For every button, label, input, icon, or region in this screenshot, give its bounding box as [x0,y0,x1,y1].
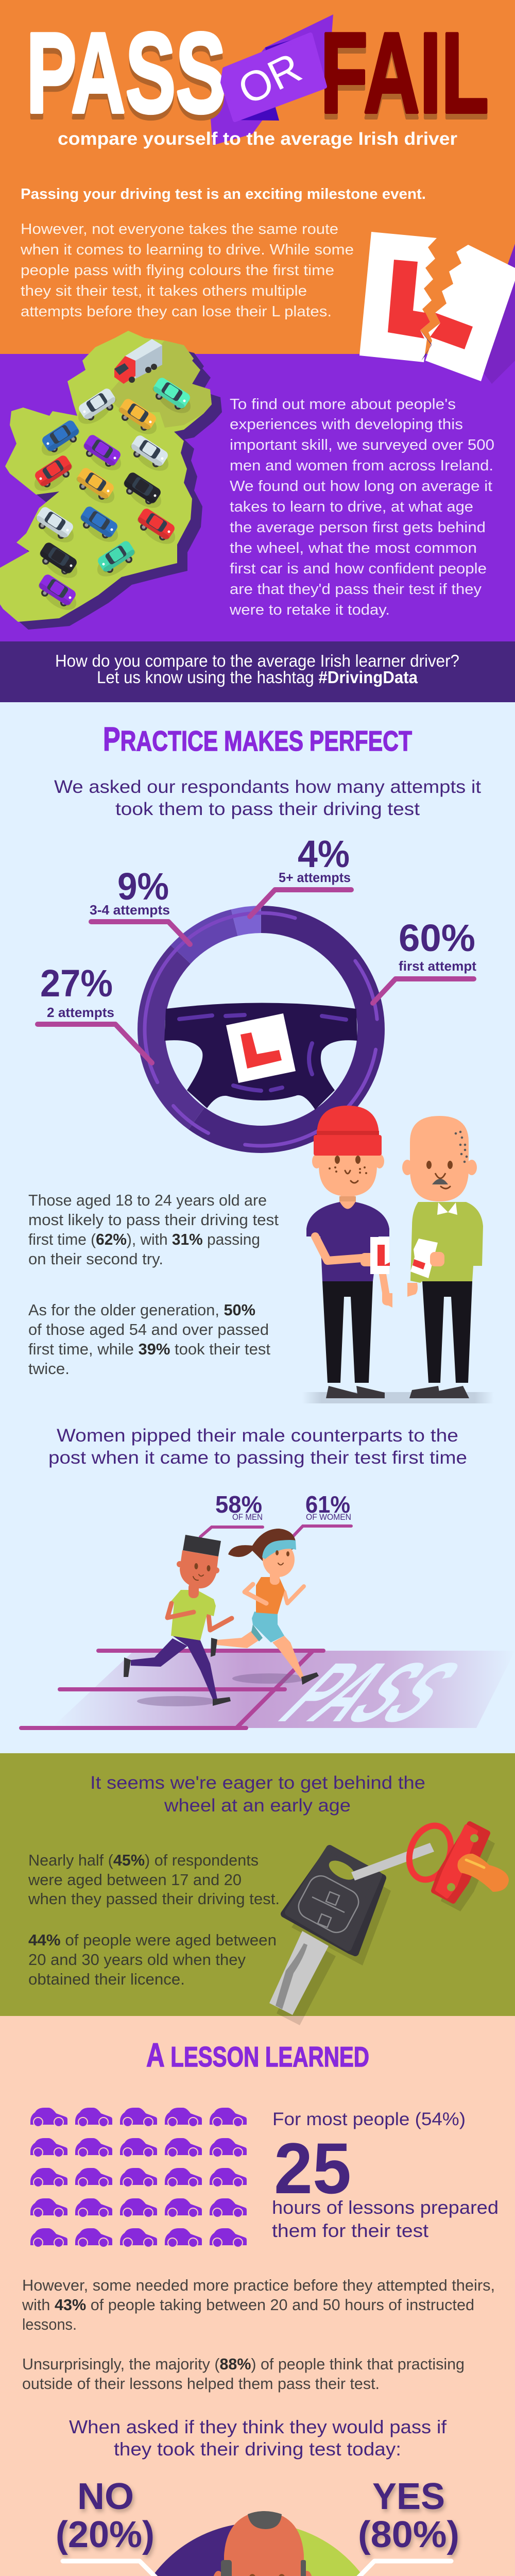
lessons text block: outside of their lessons helped them pass their test. [22,2375,380,2393]
survey text [229,396,494,618]
panel: a lesson learned [0,2016,515,2576]
northern region [106,341,212,428]
panel: early age [0,1753,515,2016]
intro text: However, not everyone takes the same route [21,221,338,238]
illustration: young man and old man with torn L plate [302,1106,494,1403]
heading: a lesson learned: A LESSON LEARNED [146,2036,369,2074]
chart: steering wheel donut of attempts [38,833,476,1146]
yes label: (80%) [358,2514,459,2555]
age text block: on their second try. [28,1250,163,1268]
label: 9%: 9% [117,865,169,908]
heading: early age [90,1773,425,1816]
survey text: To find out more about people's [230,396,456,413]
61% of women: 61% [305,1491,350,1518]
stat: 25 hours: For most people (54%) [272,2109,466,2129]
early age text block: Nearly half (45%) of respondents [28,1851,259,1869]
intro text [20,186,426,320]
label: 9%: 3-4 attempts [90,902,170,918]
lessons text block [22,2276,495,2393]
heading: would you pass today: When asked if they think they would pass if [69,2416,447,2437]
track surface [52,1651,515,1728]
young man [306,1106,392,1398]
key head [284,1849,383,1953]
yes label: YES [372,2476,445,2517]
donut ring [152,2548,363,2576]
label: 4%: 4% [298,833,350,875]
illustration: running track race [21,1491,515,1739]
key ring bar [351,1843,434,1880]
map land [0,331,212,622]
heading: early age: It seems we're eager to get behind the [90,1773,425,1793]
early age text block: 44% of people were aged between [28,1931,277,1949]
intro text: when it comes to learning to drive. While some [20,242,354,258]
survey text: first car is and how confident people [230,561,487,577]
early age text block: were aged between 17 and 20 [28,1871,242,1889]
early age text block: 20 and 30 years old when they [28,1951,246,1969]
old man [402,1116,483,1398]
label: 60%: 60% [399,917,475,959]
pacifier [402,1820,509,1901]
foot shadows [137,1673,306,1706]
heading: early age: wheel at an early age [164,1795,351,1816]
survey text: the average person first gets behind [230,519,486,536]
connectors [200,1526,351,1537]
attempts intro text: We asked our respondants how many attempts it [54,777,481,797]
label: 27%: 2 attempts [47,1005,114,1020]
survey text: important skill, we surveyed over 500 [230,437,494,453]
woman runner [211,1529,319,1685]
age text block: first time (62%), with 31% passing [28,1230,260,1248]
pass word [26,9,226,143]
subtitle: compare yourself to the average Irish driver [58,129,457,149]
early age text block: obtained their licence. [28,1970,185,1988]
ring highlights [145,913,377,1146]
age text block [28,1191,279,1378]
bearded man [209,2511,313,2576]
no label [56,2476,154,2555]
pass word: PASS [26,9,226,137]
ring segments [151,919,371,1140]
pass word: PASS [26,15,226,143]
cars [30,376,195,615]
age text block: As for the older generation, 50% [28,1301,255,1319]
panel: practice makes perfect [0,702,515,1753]
intro text: they sit their test, it takes others multiple [21,283,307,299]
age text block: of those aged 54 and over passed [28,1320,269,1338]
survey text: We found out how long on average it [230,478,492,495]
age text block: most likely to pass their driving test [28,1211,279,1229]
ground shadow [302,1392,494,1403]
attempts intro text [54,777,481,819]
wheel spokes [164,1003,357,1110]
stat: 25 hours: 25 [274,2128,351,2209]
lessons text block: lessons. [22,2315,77,2333]
panel: purple survey intro [0,354,515,641]
or badge: OR [231,44,308,114]
61% of women: OF WOMEN [306,1512,351,1522]
survey text: are that they'd pass their test if they [230,581,482,598]
key blade [269,1931,329,2015]
intro text: people pass with flying colours the first time [21,262,334,279]
stat: 25 hours: hours of lessons prepared [272,2197,499,2218]
label: 4% [279,833,351,885]
L plate [226,1013,296,1083]
icon: torn L plate [359,232,515,384]
panel: hashtag band [0,641,515,702]
connector lines [38,890,474,1063]
early age text block [28,1851,280,1988]
age text block: Those aged 18 to 24 years old are [28,1191,267,1209]
survey text: takes to learn to drive, at what age [230,499,473,515]
heading: women vs men: post when it came to passing their test first time [48,1448,467,1468]
chart: 25 car pictogram [30,2108,247,2247]
label: 4%: 5+ attempts [279,870,351,885]
icon: car key with pacifier fob [269,1820,509,2025]
label: 9% [90,865,170,918]
hashtag text: How do you compare to the average Irish learner driver? [55,651,459,670]
hashtag text: Let us know using the hashtag #DrivingData [97,668,418,687]
survey text: experiences with developing this [230,416,463,433]
heading: practice makes perfect: PRACTICE MAKES PERFECT [103,720,412,758]
map of Ireland with cars [0,331,222,630]
truck [114,339,162,384]
spoke details [179,1015,346,1091]
age text block: twice. [28,1360,70,1378]
lessons text block: However, some needed more practice before they attempted theirs, [22,2276,495,2294]
no label: (20%) [56,2514,154,2555]
heading: women vs men [48,1426,467,1468]
or badge [222,35,325,120]
yes label [358,2476,459,2555]
58% of men: OF MEN [232,1512,263,1522]
survey text: men and women from across Ireland. [230,457,493,474]
intro text: attempts before they can lose their L plates. [21,303,332,320]
lessons text block: with 43% of people taking between 20 and 50 hours of instructed [22,2296,474,2314]
heading: would you pass today: they took their driving test today: [114,2438,401,2460]
title: pass or fail [26,9,489,145]
chart: yes no donut [56,2476,459,2576]
track lines [21,1651,323,1728]
attempts intro text: took them to pass their driving test [115,799,420,819]
stat: 25 hours [272,2109,499,2241]
intro text: Passing your driving test is an exciting milestone event. [21,186,426,202]
58% of men: 58% [215,1491,262,1518]
survey text: the wheel, what the most common [230,540,477,556]
early age text block: when they passed their driving test. [28,1890,280,1908]
survey text: were to retake it today. [229,602,390,618]
stat: 25 hours: them for their test [272,2220,428,2241]
man runner [124,1535,232,1706]
no label: NO [77,2476,134,2517]
age text block: first time, while 39% took their test [28,1340,270,1358]
heading: women vs men: Women pipped their male counterparts to the [57,1426,458,1446]
panel: orange header [0,0,515,354]
label: 27%: 27% [40,962,113,1005]
label: 60%: first attempt [399,958,476,974]
heading: would you pass today [69,2416,447,2460]
key shadow [277,1833,495,2025]
connector lines [63,2561,451,2576]
hashtag text [55,651,459,687]
lessons text block: Unsurprisingly, the majority (88%) of people think that practising [22,2355,465,2373]
ribbon back [210,14,348,145]
map shadow [10,338,222,630]
